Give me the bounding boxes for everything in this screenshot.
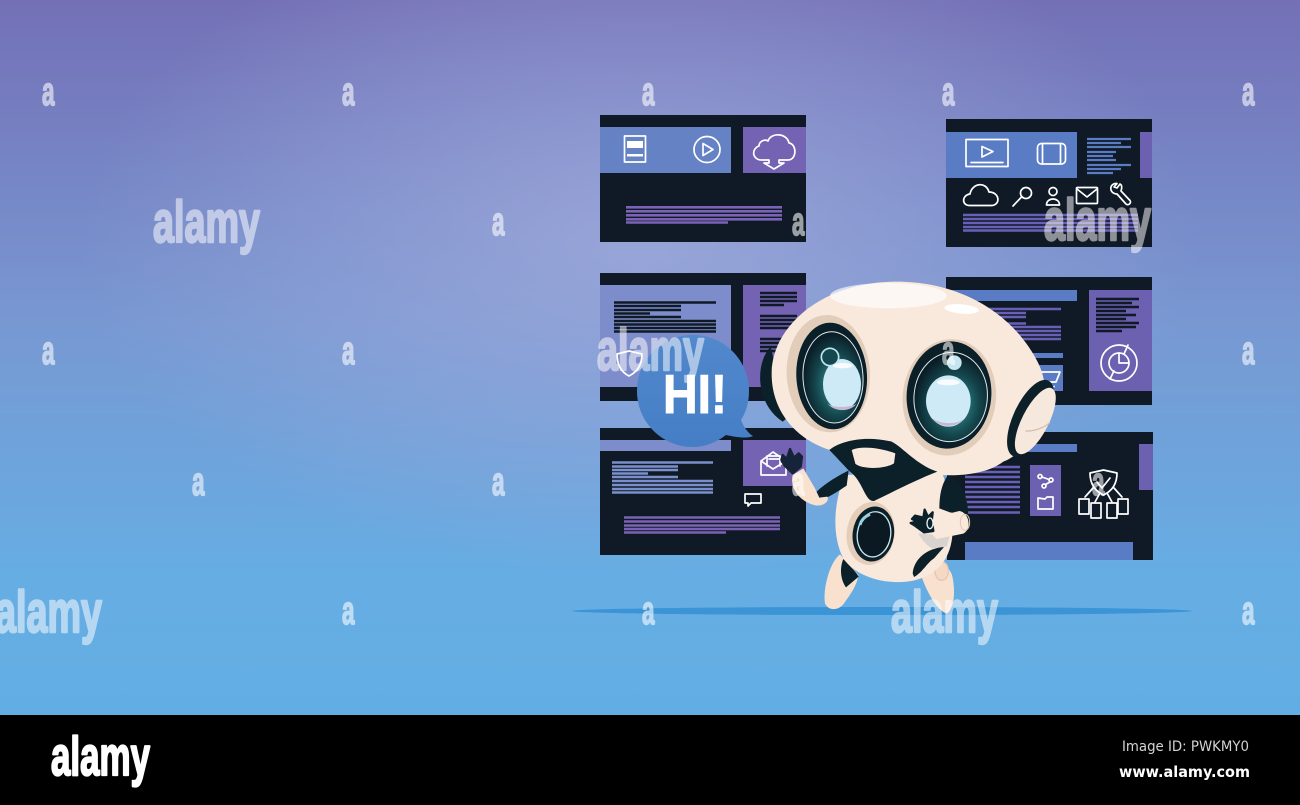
panel: bottom left card	[600, 428, 806, 555]
watermarks: a	[342, 329, 355, 373]
text lines	[963, 215, 1138, 230]
left arm upper	[816, 470, 849, 499]
watermarks: a	[1242, 70, 1255, 114]
right arm	[927, 511, 970, 539]
panel: top left card	[600, 115, 806, 242]
watermarks: a	[192, 460, 205, 504]
watermarks: a	[642, 589, 655, 633]
icon: shield	[617, 351, 642, 376]
footer logo: alamy	[51, 725, 150, 787]
text lines dark	[1096, 299, 1139, 331]
left leg	[825, 554, 859, 609]
head highlight	[830, 283, 947, 308]
left hand	[781, 449, 802, 473]
right leg	[919, 562, 954, 614]
watermarks: a	[1242, 329, 1255, 373]
left forearm	[792, 468, 828, 506]
icon: chat bubble	[745, 494, 761, 506]
watermarks: a	[792, 200, 805, 244]
text lines	[960, 309, 1061, 339]
hip joint	[913, 547, 944, 577]
watermarks: alamy	[597, 318, 704, 383]
icon: shield network	[1079, 470, 1128, 518]
text lines	[1087, 139, 1131, 173]
left ear	[760, 347, 800, 422]
floor shadow	[572, 607, 1192, 615]
icon: pie chart	[1101, 345, 1137, 381]
panel: top right card	[946, 119, 1152, 247]
right eye	[897, 334, 1002, 460]
text lines purple	[624, 518, 780, 532]
watermarks: alamy	[1044, 188, 1151, 253]
watermarks: a	[642, 70, 655, 114]
icon: user	[1046, 188, 1060, 205]
watermarks: a	[42, 70, 55, 114]
text lines	[626, 207, 782, 222]
text lines	[965, 467, 1020, 512]
watermarks: a	[492, 200, 505, 244]
icon: video player	[966, 140, 1008, 166]
icon: document	[624, 136, 646, 162]
text lines on purple	[760, 293, 797, 351]
right shoulder	[939, 477, 968, 516]
icon: open envelope	[761, 452, 786, 475]
panel: middle right card	[946, 277, 1152, 405]
website: www.alamy.com	[1119, 763, 1250, 781]
icon: share	[1038, 474, 1053, 488]
image id: Image ID: PWKMY0	[1122, 739, 1249, 755]
watermarks: a	[342, 70, 355, 114]
greeting text: HI!	[663, 363, 727, 425]
icon: folder	[1038, 497, 1053, 509]
watermarks: a	[942, 329, 955, 373]
watermarks: a	[1092, 460, 1105, 504]
icon: cloud	[964, 185, 998, 206]
beard and neck	[829, 439, 937, 501]
panel: middle left card	[600, 273, 806, 401]
watermarks: a	[792, 460, 805, 504]
icon: mail	[1076, 188, 1098, 204]
icon: cart	[1042, 372, 1060, 386]
body shadow	[918, 533, 950, 548]
speech bubble	[637, 335, 753, 447]
watermarks: a	[942, 70, 955, 114]
head	[772, 282, 1045, 475]
belly lens	[842, 499, 899, 568]
watermarks: alamy	[153, 190, 260, 255]
right ear	[997, 373, 1064, 463]
watermarks: a	[42, 329, 55, 373]
panel: bottom right card	[947, 432, 1153, 560]
icon: tablet	[1038, 144, 1066, 164]
icon: play button	[694, 136, 720, 162]
watermarks: a	[492, 460, 505, 504]
right hand	[911, 510, 933, 532]
body	[835, 472, 953, 582]
icon: cloud download	[754, 135, 795, 169]
mouth	[852, 448, 895, 468]
watermarks: a	[1242, 589, 1255, 633]
robot	[760, 282, 1064, 614]
text lines blue	[612, 462, 713, 492]
footer bar	[0, 715, 1300, 805]
watermarks	[0, 70, 1255, 645]
left eye	[784, 313, 873, 434]
watermarks: a	[342, 589, 355, 633]
watermarks: alamy	[891, 580, 998, 645]
text lines on blue	[614, 302, 716, 332]
icon: wrench	[1111, 183, 1131, 205]
icon: magnifier	[1013, 188, 1032, 206]
